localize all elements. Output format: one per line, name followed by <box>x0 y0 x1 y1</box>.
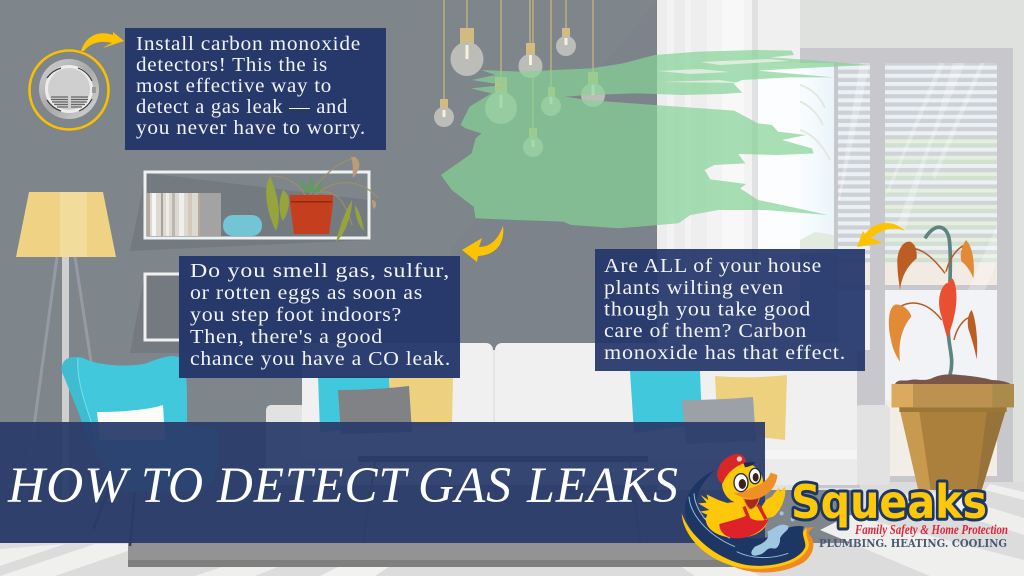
duck body <box>706 502 767 538</box>
background wall <box>0 0 657 545</box>
blinds with plant shadow <box>885 133 997 263</box>
callout: wilting plants: care of them? Carbon <box>604 320 807 342</box>
callout: smell gas: you step foot indoors? <box>190 304 402 326</box>
callout: wilting plants: monoxide has that effect. <box>604 342 846 364</box>
pot body left light <box>899 407 931 490</box>
sofa seat <box>302 450 857 485</box>
callout: install detectors: detect a gas leak — and <box>136 96 348 118</box>
chair white pillow <box>97 405 165 440</box>
window <box>758 48 1013 488</box>
callout: install detectors: detectors! This the is <box>136 54 328 76</box>
water highlights <box>689 493 788 558</box>
title: DETECT <box>216 458 410 514</box>
left yellow cushion <box>389 378 453 427</box>
pot body <box>899 407 1007 490</box>
rim shadow <box>899 407 1007 412</box>
arrow to smell tip <box>462 226 503 262</box>
right wing <box>762 487 785 518</box>
callout: install detectors <box>125 28 386 150</box>
sofa arm left <box>266 405 306 485</box>
callout: wilting plants: plants wilting even <box>604 277 784 299</box>
callout: smell gas: or rotten eggs as soon as <box>190 282 423 304</box>
stem <box>925 227 952 375</box>
leaf center red <box>939 278 956 338</box>
left blinds <box>838 63 870 133</box>
wilting plant <box>266 157 378 242</box>
arrow to plant tip <box>857 223 905 247</box>
lamp legs <box>24 257 100 500</box>
duck mascot <box>682 454 815 573</box>
window sky pane <box>758 63 834 253</box>
right wall <box>657 0 1024 490</box>
window glare <box>838 63 997 290</box>
title: TO <box>141 458 204 514</box>
floor <box>0 482 1024 576</box>
chair wing shade <box>62 357 96 440</box>
water <box>685 470 805 566</box>
title: LEAKS <box>526 458 679 514</box>
title <box>7 458 679 514</box>
picture frame <box>130 273 240 353</box>
callout: install detectors: you never have to worry. <box>136 117 366 139</box>
leaf upper right <box>961 240 974 279</box>
rug <box>128 543 768 567</box>
lamp pole <box>62 257 69 497</box>
sofa arm right <box>855 405 890 485</box>
water splash <box>751 525 788 556</box>
cloud streak gaps <box>658 59 790 83</box>
left gray cushion <box>338 386 412 434</box>
callout: smell gas <box>179 256 460 378</box>
callout: smell gas: Then, there's a good <box>190 326 383 348</box>
lamp shade <box>16 192 116 257</box>
chair seam <box>78 358 96 435</box>
leaf upper left <box>897 242 917 290</box>
bottom banner <box>0 422 765 543</box>
floor lamp <box>16 192 116 500</box>
yellow swoosh <box>682 513 809 569</box>
head <box>722 463 763 504</box>
sofa base <box>440 350 540 480</box>
callout: wilting plants: Are ALL of your house <box>604 255 822 277</box>
pot body right shade <box>977 407 1007 490</box>
shelf shadow <box>130 173 369 251</box>
teal ornament <box>223 215 262 236</box>
coffee table <box>358 456 648 543</box>
outside view <box>885 263 997 285</box>
right gray cushion <box>682 397 756 444</box>
chair shell <box>62 356 219 492</box>
callout: install detectors: Install carbon monoxide <box>136 33 361 55</box>
shelf <box>130 157 378 251</box>
wall diagonal shade <box>450 0 657 545</box>
shelf outline <box>145 172 369 238</box>
soil <box>895 374 1011 384</box>
logo wordmark: Squeaks <box>791 475 987 529</box>
callout: install detectors: most effective way to <box>136 75 332 97</box>
hanging bulbs <box>434 0 605 157</box>
beak <box>733 473 777 499</box>
sofa back left <box>302 343 493 483</box>
potted wilting plant <box>889 227 1014 490</box>
arrow to detector tip <box>81 32 124 51</box>
frame shadow <box>130 273 240 353</box>
callout: smell gas: chance you have a CO leak. <box>190 348 451 370</box>
orange swoosh <box>723 527 815 573</box>
droplets <box>780 511 784 515</box>
right blinds <box>885 63 997 133</box>
right yellow cushion <box>715 375 787 440</box>
red pot <box>290 195 333 234</box>
window base greenery <box>758 232 834 250</box>
callout: wilting plants: though you take good <box>604 298 811 320</box>
title: GAS <box>418 458 512 514</box>
curtain <box>657 0 800 440</box>
leaf lower right <box>968 310 977 359</box>
gray book <box>200 193 221 236</box>
leaf lower left <box>889 304 911 362</box>
callout: smell gas: Do you smell gas, sulfur, <box>190 260 450 282</box>
title: HOW <box>7 458 132 514</box>
overalls <box>719 515 768 538</box>
armchair <box>62 356 219 546</box>
left wing <box>698 494 735 522</box>
sofa <box>266 343 890 485</box>
frond shadows <box>760 83 830 200</box>
eyes <box>734 474 748 492</box>
gas cloud <box>441 50 870 228</box>
left teal cushion <box>318 376 391 432</box>
lamp shade highlight <box>60 192 87 257</box>
pot rim <box>892 384 1014 407</box>
stems of leaves <box>900 245 972 340</box>
logo <box>682 454 1008 573</box>
sofa back right <box>495 343 857 483</box>
hat <box>717 454 746 483</box>
books <box>147 193 200 236</box>
smoke detector icon <box>30 50 108 130</box>
callout: wilting plants <box>595 249 865 371</box>
chair legs <box>93 490 135 546</box>
right teal cushion <box>630 371 702 433</box>
